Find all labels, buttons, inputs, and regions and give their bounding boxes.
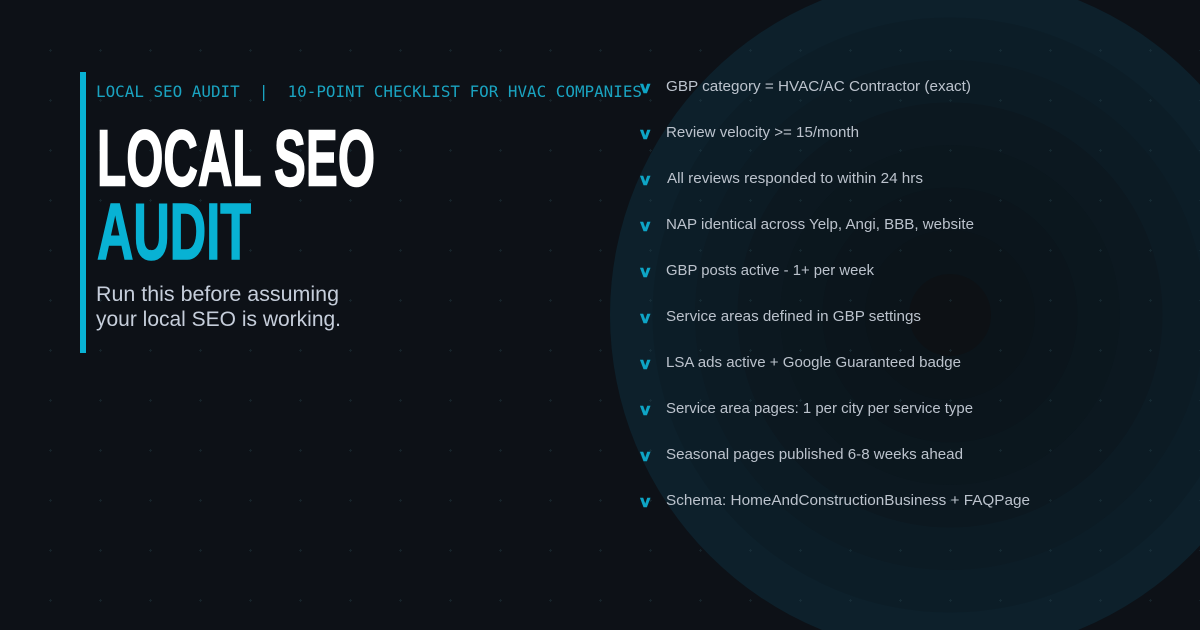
item 5: GBP posts active - 1+ per week: [666, 262, 874, 279]
title: AUDIT: [97, 187, 251, 276]
subtitle: your local SEO is working.: [96, 308, 341, 331]
item 2: v: [640, 124, 651, 143]
title: LOCAL SEO: [97, 114, 375, 202]
item 8: v: [640, 400, 651, 419]
item 1: v: [640, 78, 651, 97]
accent bar: [80, 72, 86, 353]
item 10: v: [640, 492, 651, 511]
item 4: v: [640, 216, 651, 235]
item 7: LSA ads active + Google Guaranteed badge: [666, 354, 961, 371]
item 8: Service area pages: 1 per city per service type: [666, 400, 973, 417]
item 6: Service areas defined in GBP settings: [666, 308, 921, 325]
title: [97, 114, 375, 276]
subtitle: Run this before assuming: [96, 283, 339, 306]
subtitle: [96, 283, 341, 331]
checklist: [640, 78, 1030, 511]
item 2: Review velocity >= 15/month: [666, 124, 859, 141]
item 1: GBP category = HVAC/AC Contractor (exact): [666, 78, 971, 95]
item 7: v: [640, 354, 651, 373]
item 9: v: [640, 446, 651, 465]
item 4: NAP identical across Yelp, Angi, BBB, website: [666, 216, 974, 233]
item 5: v: [640, 262, 651, 281]
eyebrow label: LOCAL SEO AUDIT | 10-POINT CHECKLIST FOR HVAC COMPANIES: [96, 82, 642, 101]
item 10: Schema: HomeAndConstructionBusiness + FAQPage: [666, 492, 1030, 509]
concentric circles background: [610, 0, 1200, 630]
item 6: v: [640, 308, 651, 327]
item 9: Seasonal pages published 6-8 weeks ahead: [666, 446, 963, 463]
item 3: v: [640, 170, 651, 189]
item 3: All reviews responded to within 24 hrs: [667, 170, 923, 187]
